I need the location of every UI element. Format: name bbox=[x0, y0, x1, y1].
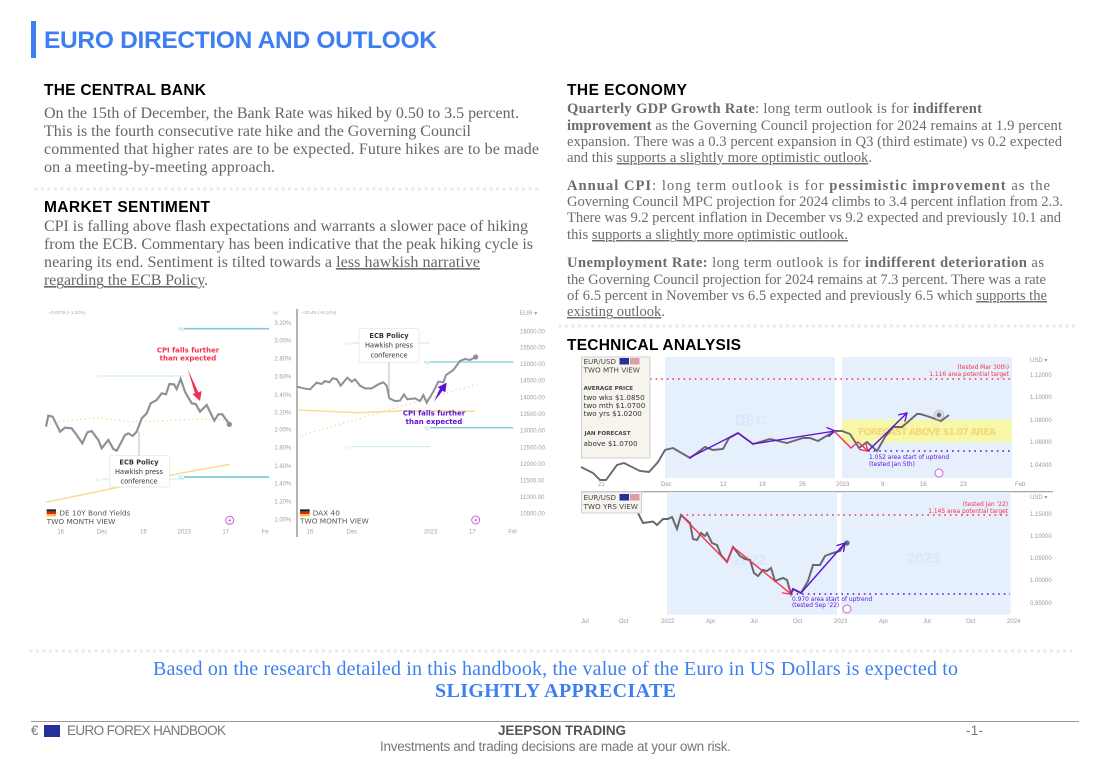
text block: market sentiment summary: CPI is falling above flash expectations and warrants a slower pace of hiking bbox=[44, 218, 528, 235]
x axis: 26 bbox=[799, 482, 806, 488]
chart: DE 10Y bond yields: S1 bbox=[95, 477, 101, 482]
chart: DAX 40: 10500.00 bbox=[520, 511, 546, 517]
chart: DAX 40: 16000.00 bbox=[520, 330, 546, 336]
chart: DAX 40: S2 bbox=[424, 426, 430, 431]
chart caption bbox=[299, 509, 369, 526]
chart: EUR/USD two month view: 1.116 area potential target bbox=[929, 372, 1010, 378]
callout: CPI falls further than expected bbox=[403, 410, 466, 426]
x axis: Oct bbox=[793, 619, 803, 625]
x axis: Oct bbox=[966, 619, 976, 625]
chart: EUR/USD two years view: 2023 bbox=[907, 550, 940, 567]
callout: ECB Policy: ECB Policy bbox=[119, 459, 159, 467]
chart: DAX 40: Dec bbox=[347, 529, 357, 535]
x axis: 2023 bbox=[836, 482, 850, 488]
callout: ECB Policy: Hawkish press bbox=[365, 342, 413, 350]
icon: EU flag bbox=[44, 725, 60, 737]
chart: DE 10Y bond yields: 16 bbox=[57, 530, 65, 536]
chart: EUR/USD two years view: 1.145 area potential target bbox=[928, 509, 1009, 515]
callout: ECB Policy bbox=[359, 328, 419, 362]
legend box: two years view bbox=[582, 492, 642, 513]
panel: the economy bbox=[567, 82, 1063, 320]
chart: DE 10Y bond yields: 1.80% bbox=[274, 446, 292, 452]
legend box: average price and forecast: two yrs $1.0200 bbox=[584, 409, 642, 418]
chart: EUR/USD two month view: 1.052 area start of uptrend bbox=[869, 455, 949, 461]
chart: DE 10Y bond yields: 2.40% bbox=[274, 393, 292, 399]
chart: DAX 40: 13500.00 bbox=[520, 412, 546, 418]
chart: DAX 40 bbox=[297, 310, 546, 535]
legend box: average price and forecast: TWO MTH VIEW bbox=[582, 366, 640, 374]
chart: DE 10Y bond yields: 1.40% bbox=[274, 482, 292, 488]
chart: DE 10Y bond yields: −0.0279 (−1.20%) bbox=[48, 310, 86, 315]
divider between charts bbox=[296, 309, 298, 537]
chart caption: DAX 40 bbox=[313, 509, 340, 518]
chart: DE 10Y bond yields: 17 bbox=[222, 530, 230, 536]
x axis: Jul bbox=[750, 619, 758, 625]
chart: DAX 40: 13000.00 bbox=[520, 429, 546, 435]
footer: Investments and trading decisions are made at your own risk. bbox=[380, 739, 731, 754]
x axis: Apr bbox=[879, 619, 888, 625]
chart: EUR/USD two month view: DEC bbox=[735, 412, 767, 429]
x axis: 9 bbox=[881, 482, 885, 488]
text block: unemployment rate: the Governing Council projection for 2024 remains at 7.3 percent. There was a rate bbox=[567, 272, 1046, 288]
legend box: average price and forecast: JAN FORECAST bbox=[584, 431, 631, 437]
x axis: 23 bbox=[960, 482, 967, 488]
arrow: red down bbox=[188, 369, 202, 401]
x axis: Feb bbox=[1015, 482, 1026, 488]
chart: DAX 40: −20.45 (+0.14%) bbox=[302, 310, 337, 315]
legend box: two years view: TWO YRS VIEW bbox=[582, 502, 638, 511]
chart: DE 10Y bond yields bbox=[46, 310, 292, 536]
panel: the central bank bbox=[44, 82, 539, 176]
chart: DE 10Y bond yields: R2 bbox=[178, 327, 184, 332]
callout: CPI falls further than expected bbox=[157, 346, 220, 363]
conclusion: SLIGHTLY APPRECIATE bbox=[435, 680, 676, 702]
chart: DAX 40: 2023 bbox=[424, 529, 438, 535]
callout: ECB Policy: Hawkish press bbox=[115, 468, 163, 476]
text block: annual CPI: Governing Council MPC projection for 2024 climbs to 3.4 percent inflation from 2.3. bbox=[567, 194, 1063, 210]
chart: DE 10Y bond yields: 2.00% bbox=[274, 427, 292, 433]
chart: DE 10Y bond yields: 2023 bbox=[178, 530, 192, 536]
x axis: 16 bbox=[920, 482, 927, 488]
y axis: 1.06000 bbox=[1030, 440, 1052, 446]
chart: DE 10Y bond yields: 1.00% bbox=[274, 518, 292, 524]
chart: DAX 40: 17 bbox=[469, 529, 476, 535]
panel: market sentiment bbox=[44, 199, 533, 289]
text block: quarterly GDP growth rate: and this supports a slightly more optimistic outlook. bbox=[567, 150, 872, 166]
y axis: 1.10000 bbox=[1030, 534, 1052, 540]
chart: DE 10Y bond yields: 16 bbox=[140, 530, 147, 536]
chart: EUR/USD two month view bbox=[581, 357, 1052, 488]
legend box: average price and forecast: above $1.0700 bbox=[584, 439, 638, 448]
x axis: 2022 bbox=[661, 619, 675, 625]
y axis: 1.10000 bbox=[1030, 395, 1052, 401]
text block: market sentiment summary: regarding the ECB Policy. bbox=[44, 272, 208, 289]
text block: central bank summary: On the 15th of December, the Bank Rate was hiked by 0.50 to 3.5 percent. bbox=[44, 105, 519, 122]
x axis bbox=[581, 619, 1021, 625]
y axis: 1.15000 bbox=[1030, 512, 1052, 518]
chart: DAX 40: R2 bbox=[424, 360, 430, 365]
chart: DE 10Y bond yields: S2 bbox=[178, 475, 184, 480]
y axis: USD ▾ bbox=[1030, 358, 1047, 364]
title: EURO DIRECTION AND OUTLOOK bbox=[44, 27, 437, 54]
x axis: Dec bbox=[661, 482, 672, 488]
chart caption bbox=[46, 509, 131, 526]
chart: DE 10Y bond yields: 2.20% bbox=[274, 410, 292, 416]
chart: DAX 40: 11000.00 bbox=[520, 495, 545, 501]
text block: unemployment rate bbox=[567, 255, 1047, 320]
text block: quarterly GDP growth rate: expansion. There was a 0.3 percent expansion in Q3 (third estimate) vs 0.2 expected bbox=[567, 134, 1063, 150]
legend box: average price and forecast: AVERAGE PRICE bbox=[584, 386, 633, 392]
text block: market sentiment summary bbox=[44, 218, 533, 289]
chart caption: DE 10Y Bond Yields bbox=[59, 509, 131, 518]
callout: ECB Policy bbox=[109, 456, 169, 487]
chart: DE 10Y bond yields: 2.60% bbox=[274, 375, 292, 381]
chart: DAX 40: 11500.00 bbox=[520, 479, 545, 485]
footer: JEEPSON TRADING bbox=[498, 723, 626, 738]
x axis: 2024 bbox=[1007, 619, 1021, 625]
chart: DAX 40: S1 bbox=[345, 445, 351, 450]
footer: EURO FOREX HANDBOOK bbox=[67, 723, 226, 738]
chart: EUR/USD two month view: (tested Jan 5th) bbox=[869, 462, 915, 468]
chart: DE 10Y bond yields: % bbox=[273, 310, 278, 316]
chart: DAX 40: 15500.00 bbox=[520, 346, 546, 352]
chart: DE 10Y bond yields: 1.60% bbox=[274, 464, 292, 470]
legend box: average price and forecast bbox=[582, 357, 650, 458]
text block: unemployment rate: existing outlook. bbox=[567, 304, 665, 320]
x axis bbox=[598, 482, 1026, 488]
text block: quarterly GDP growth rate: Quarterly GDP Growth Rate: long term outlook is for indifferent bbox=[567, 101, 982, 117]
text block: unemployment rate: of 6.5 percent in November vs 6.5 expected and previously 6.5 which supports the bbox=[567, 288, 1047, 304]
heading: the central bank: THE CENTRAL BANK bbox=[44, 82, 207, 99]
chart: DAX 40: 15000.00 bbox=[520, 362, 546, 368]
x axis: Jul bbox=[581, 619, 589, 625]
chart: EUR/USD two years view: 0.970 area start of uptrend bbox=[792, 597, 872, 603]
chart: EUR/USD two years view: 2022 bbox=[733, 552, 766, 569]
text block: central bank summary: on a meeting-by-meeting approach. bbox=[44, 159, 275, 176]
legend box: average price and forecast: EUR/USD bbox=[584, 357, 617, 366]
chart: EUR/USD two month view: (tested Mar 30th) bbox=[957, 365, 1009, 371]
chart: DAX 40: 14500.00 bbox=[520, 379, 546, 385]
callout: CPI falls further than expected: CPI falls further bbox=[157, 346, 220, 354]
heading: technical analysis: TECHNICAL ANALYSIS bbox=[567, 337, 741, 354]
footer: -1- bbox=[966, 723, 983, 738]
x axis: 2023 bbox=[834, 619, 848, 625]
y axis: 1.12000 bbox=[1030, 373, 1052, 379]
text block: unemployment rate: Unemployment Rate: long term outlook is for indifferent deterioration as bbox=[567, 255, 1044, 271]
chart: EUR/USD two years view: (tested Jan '22) bbox=[963, 502, 1008, 508]
chart caption: TWO MONTH VIEW bbox=[299, 517, 369, 526]
x axis: 19 bbox=[759, 482, 766, 488]
chart caption: TWO MONTH VIEW bbox=[46, 517, 115, 526]
y axis: USD ▾ bbox=[1030, 495, 1047, 501]
x axis: Jul bbox=[923, 619, 931, 625]
chart: DAX 40: 16 bbox=[307, 529, 314, 535]
x axis: Oct bbox=[619, 619, 629, 625]
footer bbox=[31, 722, 1079, 754]
chart: DAX 40: 12000.00 bbox=[520, 462, 546, 468]
callout: ECB Policy: conference bbox=[370, 351, 408, 359]
text block: central bank summary: This is the fourth consecutive rate hike and the Governing Council bbox=[44, 123, 472, 140]
text block: quarterly GDP growth rate: improvement as the Governing Council projection for 2024 remains at 1.9 percent bbox=[567, 118, 1062, 134]
chart: DE 10Y bond yields: 3.00% bbox=[274, 339, 292, 345]
callout: CPI falls further than expected: than expected bbox=[160, 355, 216, 363]
legend box: two years view: EUR/USD bbox=[584, 493, 617, 502]
chart: EUR/USD two month view: FORECAST ABOVE $1.07 AREA bbox=[858, 427, 997, 438]
y axis: 0.95000 bbox=[1030, 601, 1052, 607]
chart: DE 10Y bond yields: Fe bbox=[262, 530, 269, 536]
arrow: purple up bbox=[434, 383, 447, 402]
text block: central bank summary bbox=[44, 105, 539, 176]
conclusion: Based on the research detailed in this handbook, the value of the Euro in US Dollars is expected to bbox=[153, 658, 958, 680]
footer: € bbox=[31, 723, 39, 738]
x axis: 21 bbox=[598, 482, 605, 488]
text block: market sentiment summary: from the ECB. Commentary has been indicative that the peak hiking cycle is bbox=[44, 236, 533, 253]
chart: DE 10Y bond yields: 2.80% bbox=[274, 357, 292, 363]
chart: DAX 40: 12500.00 bbox=[520, 445, 546, 451]
x axis: 12 bbox=[720, 482, 727, 488]
chart: DE 10Y bond yields: 3.20% bbox=[274, 321, 292, 327]
legend box: average price and forecast: two wks $1.0850 bbox=[584, 393, 645, 402]
text block: annual CPI: There was 9.2 percent inflation in December vs 9.2 expected and previously 10.1 and bbox=[567, 210, 1062, 226]
heading: market sentiment: MARKET SENTIMENT bbox=[44, 199, 211, 216]
text block: annual CPI bbox=[567, 178, 1063, 243]
heading: the economy: THE ECONOMY bbox=[567, 82, 688, 99]
y axis bbox=[1030, 358, 1052, 469]
chart: DAX 40: R1 bbox=[345, 341, 351, 346]
chart: EUR/USD two years view: (tested Sep '22) bbox=[792, 603, 839, 609]
chart: DAX 40: EUR ▾ bbox=[520, 311, 537, 317]
callout: ECB Policy: conference bbox=[120, 477, 158, 485]
y axis: 1.00000 bbox=[1030, 578, 1052, 584]
chart: DE 10Y bond yields: R1 bbox=[95, 374, 101, 379]
chart: DAX 40: 14000.00 bbox=[520, 395, 546, 401]
legend box: average price and forecast: two mth $1.0700 bbox=[584, 401, 646, 410]
chart: EUR/USD two years view bbox=[581, 492, 1053, 625]
text block: annual CPI: Annual CPI: long term outlook is for pessimistic improvement as the bbox=[567, 178, 1050, 194]
callout: CPI falls further than expected: CPI falls further bbox=[403, 410, 466, 418]
chart: DE 10Y bond yields: Dec bbox=[97, 530, 107, 536]
y axis: 1.04000 bbox=[1030, 463, 1052, 469]
chart: DAX 40: Fel bbox=[508, 529, 517, 535]
callout: ECB Policy: ECB Policy bbox=[369, 332, 409, 340]
conclusion bbox=[153, 658, 958, 702]
y axis: 1.08000 bbox=[1030, 418, 1052, 424]
chart: DE 10Y bond yields: 1.20% bbox=[274, 500, 292, 506]
text block: quarterly GDP growth rate bbox=[567, 101, 1063, 166]
y axis bbox=[1030, 495, 1052, 607]
x axis: Apr bbox=[706, 619, 715, 625]
text block: central bank summary: commented that higher rates are to be expected. Future hikes are to be made bbox=[44, 141, 539, 158]
text block: annual CPI: this supports a slightly more optimistic outlook. bbox=[567, 227, 848, 243]
text block: market sentiment summary: nearing its end. Sentiment is tilted towards a less hawkish narrative bbox=[44, 254, 480, 271]
callout: CPI falls further than expected: than expected bbox=[406, 418, 462, 426]
y axis: 1.05000 bbox=[1030, 556, 1052, 562]
